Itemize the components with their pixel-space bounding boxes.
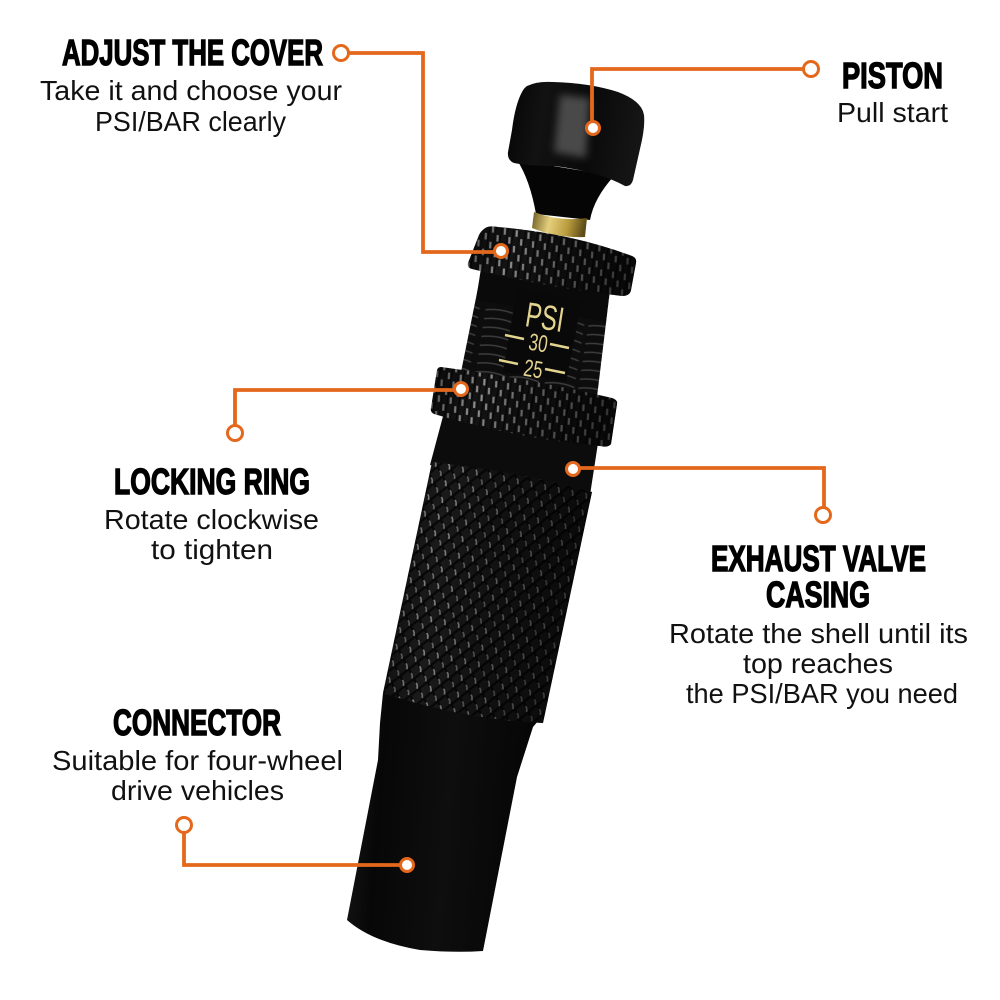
text block: connector: CONNECTOR (113, 702, 281, 743)
text block: adjust the cover: Take it and choose your (40, 75, 342, 106)
text block: locking ring (104, 461, 319, 565)
text block: piston: PISTON (842, 55, 943, 96)
text block: exhaust valve casing: CASING (766, 574, 870, 615)
line: locking ring (228, 382, 468, 440)
neck of piston (517, 160, 614, 220)
PSI scale markings: PSI (523, 296, 567, 340)
knurled grip (383, 462, 592, 723)
text block: exhaust valve casing: top reaches (743, 648, 893, 679)
text block: piston: Pull start (837, 97, 948, 128)
body with PSI scale (461, 262, 610, 397)
PSI scale markings: 30 (527, 329, 550, 358)
line: exhaust valve casing (566, 462, 830, 522)
line: piston (586, 62, 818, 134)
text block: locking ring: to tighten (151, 534, 273, 565)
casing collar (430, 405, 600, 495)
text block: adjust the cover: ADJUST THE COVER (62, 32, 323, 73)
text block: locking ring: LOCKING RING (114, 461, 310, 502)
piston cap (508, 82, 644, 186)
lower connector tube (347, 693, 543, 952)
product: tire deflator valve (347, 82, 644, 952)
PSI scale markings (499, 296, 569, 384)
text block: connector (52, 702, 343, 806)
text block: exhaust valve casing: the PSI/BAR you need (686, 678, 958, 709)
text block: adjust the cover (40, 32, 342, 137)
text block: connector: drive vehicles (111, 775, 284, 806)
lower locking ring (431, 367, 617, 447)
text block: locking ring: Rotate clockwise (104, 504, 319, 535)
cap highlight (554, 95, 590, 158)
PSI scale markings: 25 (522, 355, 545, 384)
line: adjust the cover (334, 46, 508, 258)
text block: piston (837, 55, 948, 128)
brass band (532, 212, 587, 237)
line: connector (176, 818, 414, 872)
text block: exhaust valve casing (669, 538, 968, 709)
text block: exhaust valve casing: EXHAUST VALVE (711, 538, 926, 579)
text block: adjust the cover: PSI/BAR clearly (95, 106, 286, 137)
text block: connector: Suitable for four-wheel (52, 745, 343, 776)
upper adjusting ring (468, 226, 636, 296)
text block: exhaust valve casing: Rotate the shell until its (669, 618, 968, 649)
callout lines (176, 46, 830, 872)
